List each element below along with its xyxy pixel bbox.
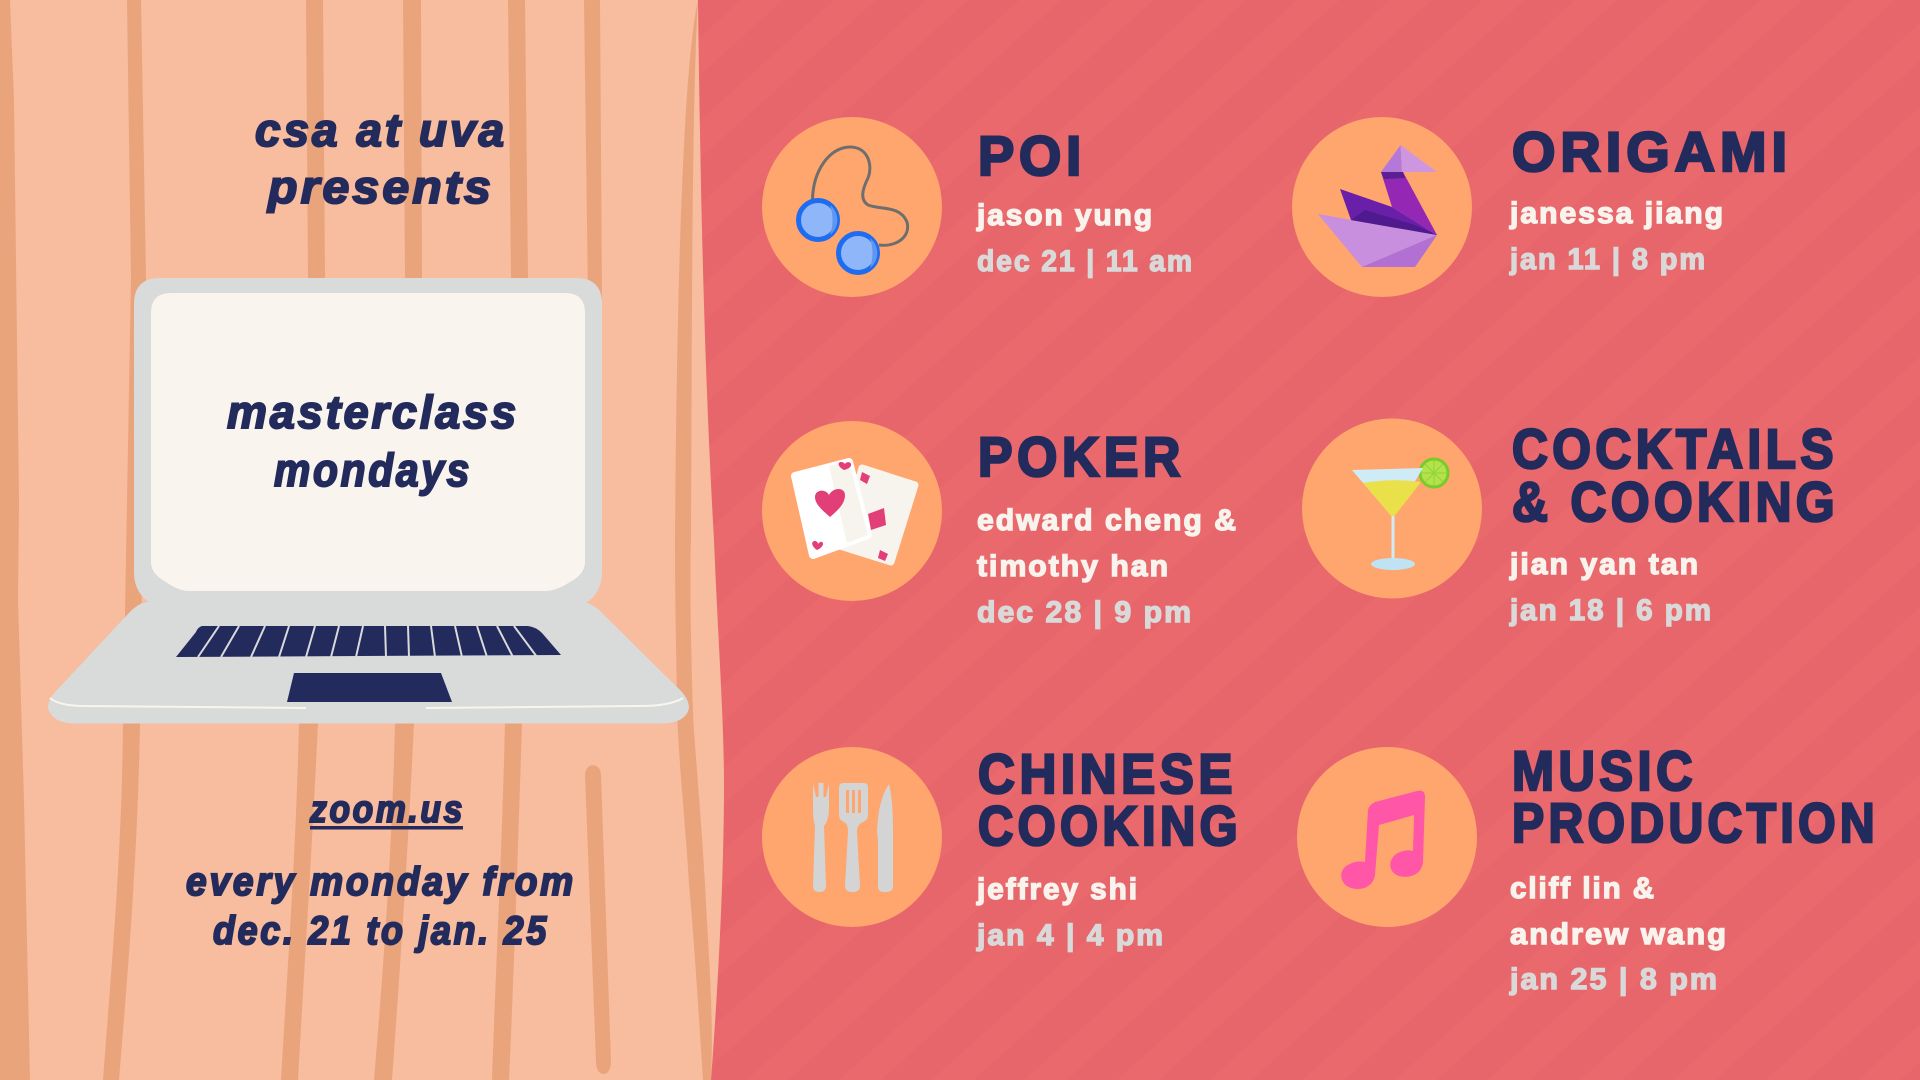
hosts: andrew wang — [1510, 918, 1728, 951]
host: jason yung — [976, 199, 1154, 232]
class title: COCKTAILS — [1512, 417, 1838, 480]
class title: POKER — [978, 425, 1185, 488]
panel: origami — [1292, 117, 1792, 297]
class title: ORIGAMI — [1512, 120, 1792, 183]
class title — [1512, 417, 1839, 533]
panel: chinese cooking — [762, 742, 1242, 952]
class title: CHINESE — [978, 742, 1237, 805]
panel: poker — [762, 421, 1238, 629]
host: jeffrey shi — [976, 873, 1139, 906]
date: dec 21 | 11 am — [977, 245, 1194, 278]
class title: MUSIC — [1512, 739, 1697, 802]
schedule text: every monday from — [186, 860, 576, 904]
icon: fork, spatula, knife — [762, 747, 942, 927]
date: jan 11 | 8 pm — [1509, 243, 1707, 276]
heading: csa at uva presents — [255, 104, 507, 213]
class title — [978, 742, 1242, 857]
date: dec 28 | 9 pm — [977, 596, 1193, 629]
schedule text — [186, 860, 576, 953]
title on laptop screen: masterclass mondays: masterclass — [227, 386, 519, 438]
icon: music note — [1297, 747, 1477, 927]
hosts — [977, 504, 1238, 583]
heading: csa at uva presents: presents — [266, 161, 494, 213]
host: jian yan tan — [1509, 548, 1700, 581]
date: jan 4 | 4 pm — [976, 919, 1165, 952]
date: jan 18 | 6 pm — [1509, 594, 1713, 627]
panel: music production — [1297, 739, 1879, 996]
heading: csa at uva presents: csa at uva — [255, 104, 507, 156]
class title: & COOKING — [1512, 470, 1839, 533]
schedule text: dec. 21 to jan. 25 — [213, 909, 549, 953]
hosts: cliff lin & — [1510, 872, 1656, 905]
hosts: timothy han — [977, 550, 1170, 583]
icon: poi — [762, 117, 942, 297]
icon: playing cards — [762, 421, 942, 601]
icon: origami swan — [1292, 117, 1472, 297]
hosts: edward cheng & — [977, 504, 1238, 537]
title on laptop screen: masterclass mondays: mondays — [274, 444, 472, 496]
class title — [1512, 739, 1879, 854]
curtain panel — [0, 0, 724, 1080]
date: jan 25 | 8 pm — [1509, 963, 1719, 996]
panel: cocktails and cooking — [1302, 417, 1839, 627]
class title: COOKING — [978, 794, 1242, 857]
class title: POI — [978, 124, 1086, 187]
link: zoom.us: zoom.us — [309, 789, 465, 831]
icon: cocktail glass — [1302, 418, 1482, 598]
laptop illustration — [48, 278, 689, 724]
hosts — [1510, 872, 1728, 951]
title on laptop screen: masterclass mondays — [227, 386, 519, 496]
host: janessa jiang — [1509, 197, 1725, 230]
panel: poi — [762, 117, 1194, 297]
